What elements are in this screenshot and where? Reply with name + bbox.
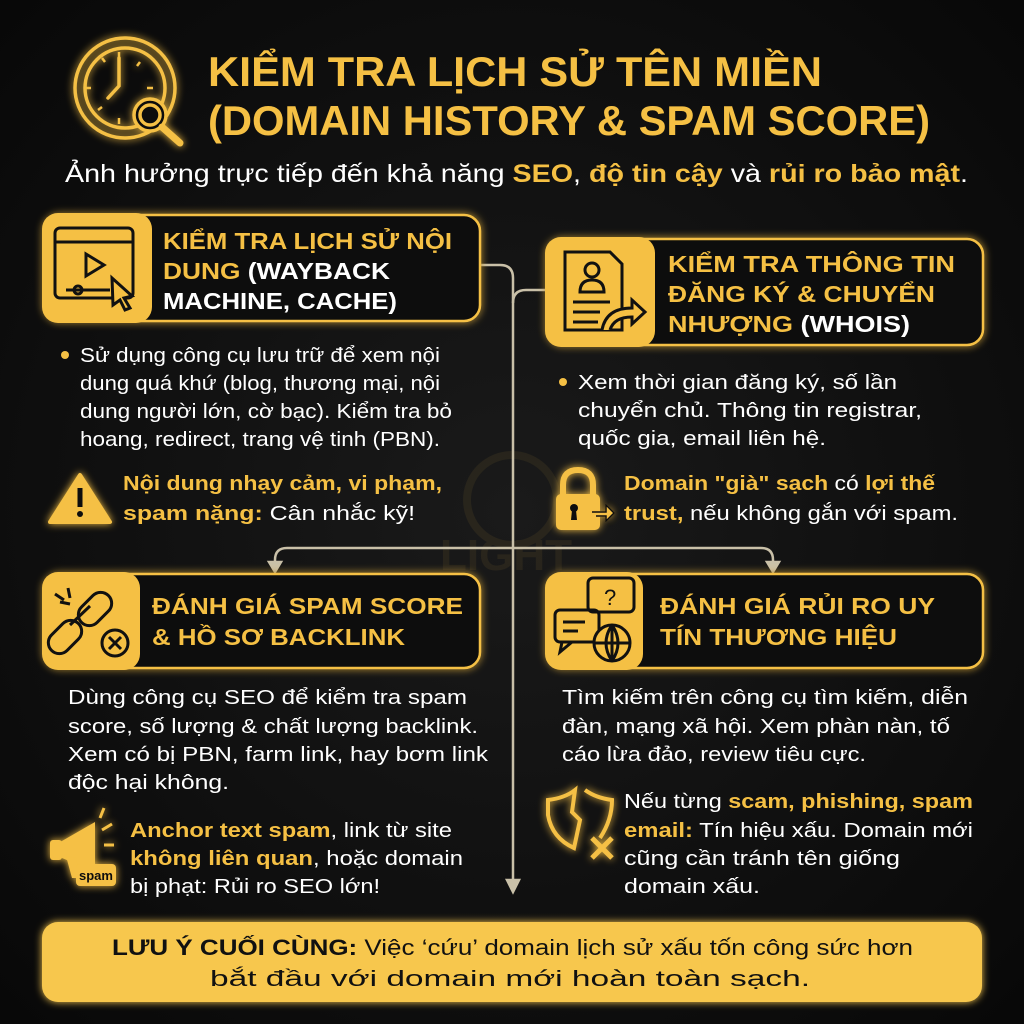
text block: brand risk: đàn, mạng xã hội. Xem phàn nàn, tố: [562, 716, 950, 738]
title: KIỂM TRA LỊCH SỬ TÊN MIỀN: [208, 47, 822, 95]
callout: shield: email: Tín hiệu xấu. Domain mới: [624, 820, 973, 842]
panel: brand risk: [545, 572, 983, 670]
panel: brand risk: ĐÁNH GIÁ RỦI RO UY: [660, 591, 935, 619]
icon: broken shield: [548, 790, 612, 858]
icon: broken link: [42, 572, 140, 670]
text block: content history: dung quá khứ (blog, thương mại, nội: [80, 373, 440, 395]
callout: shield: Nếu từng scam, phishing, spam: [624, 791, 973, 813]
text block: content history: hoang, redirect, trang vệ tinh (PBN).: [80, 429, 440, 451]
callout: warning: [123, 473, 442, 525]
text block: whois: chuyển chủ. Thông tin registrar,: [578, 400, 922, 422]
panel: content history: DUNG (WAYBACK: [163, 258, 390, 284]
icon: clock with magnifier: [75, 38, 180, 143]
callout: megaphone: [130, 820, 463, 898]
callout: megaphone: Anchor text spam , link từ site: [130, 820, 452, 842]
icon: warning: [50, 475, 110, 522]
panel: content history: MACHINE, CACHE): [163, 288, 397, 314]
subtitle: Ảnh hưởng trực tiếp đến khả năng SEO , độ tin cậy và rủi ro bảo mật .: [65, 158, 968, 188]
callout: lock: Domain "già" sạch có lợi thế: [624, 473, 936, 495]
panel: whois: NHƯỢNG (WHOIS): [668, 311, 910, 337]
text block: content history: dung người lớn, cờ bạc). Kiểm tra bỏ: [80, 401, 452, 423]
text block: spam score: độc hại không.: [68, 772, 229, 794]
text block: whois: Xem thời gian đăng ký, số lần: [578, 372, 897, 394]
panel: whois: [545, 237, 983, 347]
panel: spam score: [42, 572, 480, 670]
callout: warning: spam nặng: Cân nhắc kỹ!: [123, 502, 415, 525]
title: (DOMAIN HISTORY & SPAM SCORE): [208, 97, 930, 144]
text block: spam score: score, số lượng & chất lượng backlink.: [68, 716, 478, 738]
callout: shield: [624, 791, 973, 898]
icon: chat globe: [545, 572, 643, 670]
text block: brand risk: cáo lừa đảo, review tiêu cực.: [562, 744, 866, 766]
panel: whois: ĐĂNG KÝ & CHUYỂN: [668, 280, 935, 307]
callout: final note banner: LƯU Ý CUỐI CÙNG: Việc ‘cứu’ domain lịch sử xấu tốn công sức hơn: [112, 934, 913, 960]
watermark: [440, 455, 572, 580]
text block: brand risk: [562, 686, 968, 766]
text block: whois: quốc gia, email liên hệ.: [578, 428, 826, 450]
icon: chat globe: ?: [604, 585, 616, 610]
text block: brand risk: Tìm kiếm trên công cụ tìm kiếm, diễn: [562, 686, 968, 709]
text block: whois: [559, 372, 922, 450]
panel: brand risk: TÍN THƯƠNG HIỆU: [660, 623, 897, 650]
connectors: [269, 265, 779, 892]
icon: lock: [556, 470, 614, 530]
icon: megaphone: [50, 808, 116, 886]
callout: megaphone: bị phạt: Rủi ro SEO lớn!: [130, 876, 380, 898]
icon: document person: [545, 237, 655, 347]
text block: spam score: Dùng công cụ SEO để kiểm tra spam: [68, 687, 467, 709]
text block: spam score: [68, 687, 489, 794]
icon: browser play: [42, 213, 152, 323]
title: [208, 47, 930, 144]
panel: spam score: & HỒ SƠ BACKLINK: [152, 623, 405, 650]
panel: content history: [42, 213, 480, 323]
callout: megaphone: không liên quan , hoặc domain: [130, 848, 463, 870]
icon: megaphone: spam: [79, 868, 113, 883]
callout: shield: cũng cần tránh tên giống: [624, 848, 900, 870]
watermark: LIGHT: [440, 531, 572, 580]
text block: content history: [61, 345, 452, 451]
callout: final note banner: [42, 922, 982, 1002]
callout: warning: Nội dung nhạy cảm, vi phạm,: [123, 473, 442, 495]
callout: shield: domain xấu.: [624, 876, 760, 898]
callout: lock: trust, nếu không gắn với spam.: [624, 502, 958, 525]
panel: whois: KIỂM TRA THÔNG TIN: [668, 250, 955, 277]
panel: content history: KIỂM TRA LỊCH SỬ NỘI: [163, 226, 452, 254]
panel: spam score: ĐÁNH GIÁ SPAM SCORE: [152, 592, 463, 619]
callout: lock: [624, 473, 958, 525]
callout: final note banner: bắt đầu với domain mới hoàn toàn sạch.: [210, 966, 810, 991]
text block: content history: Sử dụng công cụ lưu trữ để xem nội: [80, 345, 440, 367]
text block: spam score: Xem có bị PBN, farm link, hay bơm link: [68, 744, 489, 766]
